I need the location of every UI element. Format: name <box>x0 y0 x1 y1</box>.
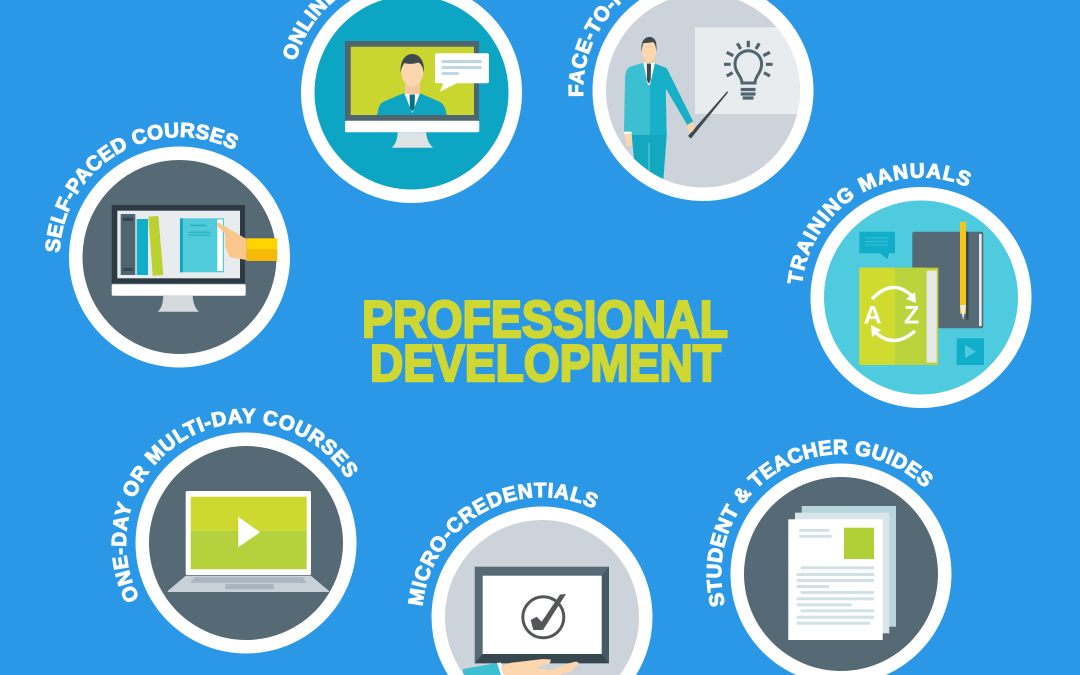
heading: student and teacher guides: STUDENT & TEACHER GUIDES <box>706 439 933 607</box>
title: Professional Development: PROFESSIONAL <box>362 291 728 349</box>
panel: online courses <box>283 0 522 203</box>
books <box>121 214 224 276</box>
panel: one-day or multi-day courses <box>111 408 358 654</box>
panel: face-to-face <box>568 0 814 201</box>
pointer <box>688 91 728 138</box>
presenter figure <box>624 37 695 192</box>
icon: notebook and pencil <box>912 222 983 328</box>
icon: speech bubble <box>435 53 489 92</box>
heading: training manuals: TRAINING MANUALS <box>787 162 971 284</box>
icon: stacked documents <box>788 506 896 640</box>
hand and sleeve <box>217 222 277 261</box>
icon: laptop with video <box>168 491 329 592</box>
title: Professional Development <box>362 291 728 393</box>
icon: monitor with e-books <box>112 205 277 312</box>
icon: A-Z dictionary: A <box>864 302 882 330</box>
illustration: hand holding tablet <box>463 659 579 675</box>
icon: A-Z dictionary <box>859 268 938 365</box>
illustration: presenter at whiteboard <box>624 27 800 179</box>
icon: play square <box>957 338 984 365</box>
icon: monitor with presenter <box>345 41 489 148</box>
title: Professional Development: DEVELOPMENT <box>370 335 721 393</box>
heading: one-day or multi-day courses: ONE-DAY OR MULTI-DAY COURSES <box>111 408 358 602</box>
panel: micro-credentials <box>408 482 652 675</box>
panel: self-paced courses <box>45 122 290 368</box>
panel: training manuals <box>787 162 1032 408</box>
icon: tablet with check mark <box>475 567 609 663</box>
icon: chat bubble <box>859 232 895 259</box>
heading: micro-credentials: MICRO-CREDENTIALS <box>408 482 598 606</box>
icon: A-Z dictionary: Z <box>904 302 919 330</box>
heading: self-paced courses: SELF-PACED COURSES <box>45 122 238 252</box>
panel: student and teacher guides <box>706 439 952 675</box>
icon: light bulb <box>724 41 773 98</box>
